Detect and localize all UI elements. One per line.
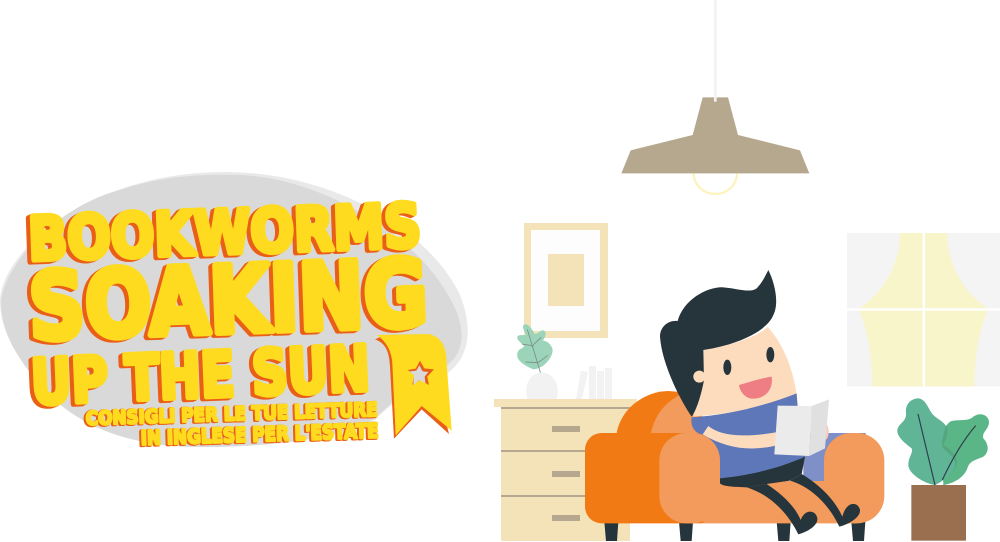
title: bookworms soaking up the sun bbox=[27, 191, 430, 450]
man body and head bbox=[660, 270, 805, 480]
grey blob background bbox=[0, 172, 468, 447]
sofa and reading man bbox=[585, 270, 884, 541]
sofa back bbox=[585, 391, 866, 541]
heading line: up the sun: UP THE SUN bbox=[30, 332, 371, 419]
potted leaf on dresser bbox=[517, 324, 558, 399]
heading line: bookworms: BOOKWORMS bbox=[27, 191, 422, 275]
arm and hands bbox=[703, 425, 829, 448]
heading line: soaking: SOAKING bbox=[27, 240, 430, 361]
books on dresser bbox=[576, 366, 612, 399]
subtitle line 1: CONSIGLI PER LE TUE LETTURE bbox=[85, 399, 378, 430]
man legs and feet bbox=[720, 457, 860, 534]
potted plant bbox=[897, 398, 989, 541]
window with curtains bbox=[847, 233, 1000, 386]
pendant lamp bbox=[621, 0, 809, 194]
subtitle line 2: IN INGLESE PER L'ESTATE bbox=[140, 419, 379, 450]
open book bbox=[774, 399, 829, 456]
plant leaves bbox=[897, 398, 989, 485]
icon: bookmark ribbon with star bbox=[375, 334, 452, 439]
plant pot bbox=[911, 485, 966, 541]
dresser bbox=[494, 399, 637, 541]
wall picture frame bbox=[524, 223, 608, 338]
sofa front cushions bbox=[659, 433, 884, 523]
